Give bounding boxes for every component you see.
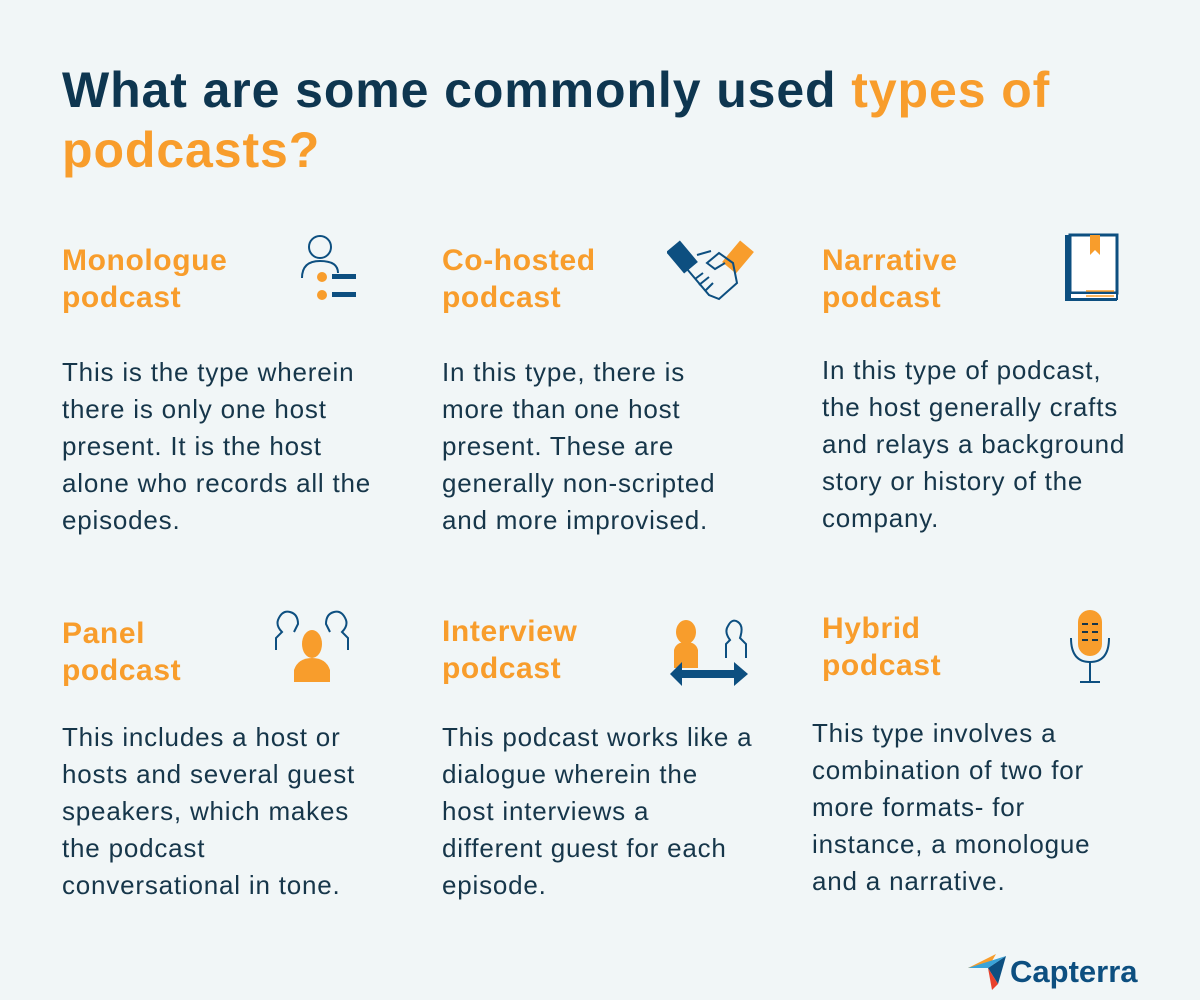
heading: interview: Interview xyxy=(442,615,577,648)
body: interview: dialogue wherein the xyxy=(442,759,698,789)
heading: co-hosted: podcast xyxy=(442,281,561,314)
panel: panel podcast xyxy=(62,610,355,900)
panel: narrative xyxy=(822,234,1125,533)
heading: hybrid xyxy=(822,612,941,682)
body: interview: different guest for each xyxy=(442,833,727,863)
title: What are some commonly used types of xyxy=(62,62,1050,118)
heading: interview: podcast xyxy=(442,652,561,685)
title: podcasts? xyxy=(62,122,320,178)
heading: co-hosted: Co-hosted xyxy=(442,244,596,277)
body: hybrid: more formats- for xyxy=(812,792,1025,822)
body: hybrid: instance, a monologue xyxy=(812,829,1090,859)
icon: person checklist xyxy=(301,235,356,300)
body: interview xyxy=(442,722,752,900)
body: co-hosted: generally non-scripted xyxy=(442,468,715,498)
body: co-hosted: In this type, there is xyxy=(442,357,685,387)
body: narrative: and relays a background xyxy=(822,429,1125,459)
body: hybrid: combination of two for xyxy=(812,755,1084,785)
icon: interview arrows xyxy=(670,620,748,686)
icon: microphone xyxy=(1070,610,1110,683)
panel: interview xyxy=(442,615,752,900)
body: interview: episode. xyxy=(442,870,547,900)
body: monologue: present. It is the host xyxy=(62,431,322,461)
heading: interview xyxy=(442,615,577,685)
body: co-hosted: present. These are xyxy=(442,431,674,461)
icon: group xyxy=(275,610,349,682)
heading: hybrid: Hybrid xyxy=(822,612,921,645)
body: panel: the podcast xyxy=(62,833,205,863)
body: hybrid: and a narrative. xyxy=(812,866,1005,896)
heading: co-hosted xyxy=(442,244,596,314)
body: interview: This podcast works like a xyxy=(442,722,752,752)
heading: narrative xyxy=(822,244,957,314)
body: narrative: the host generally crafts xyxy=(822,392,1118,422)
heading: monologue: Monologue xyxy=(62,244,227,277)
heading: hybrid: podcast xyxy=(822,649,941,682)
body: co-hosted xyxy=(442,357,715,535)
heading: monologue xyxy=(62,244,227,314)
body: narrative: story or history of the xyxy=(822,466,1083,496)
body: panel: This includes a host or xyxy=(62,722,341,752)
heading: narrative: Narrative xyxy=(822,244,957,277)
body: panel xyxy=(62,722,355,900)
body: narrative xyxy=(822,355,1125,533)
body: monologue: This is the type wherein xyxy=(62,357,354,387)
body: narrative: company. xyxy=(822,503,939,533)
title xyxy=(62,62,1050,178)
heading: panel: Panel xyxy=(62,617,145,650)
body: monologue: episodes. xyxy=(62,505,180,535)
body: hybrid: This type involves a xyxy=(812,718,1056,748)
heading: panel: podcast xyxy=(62,654,181,687)
body: hybrid xyxy=(812,718,1090,896)
body: monologue: there is only one host xyxy=(62,394,327,424)
icon: handshake xyxy=(667,240,754,300)
body: co-hosted: and more improvised. xyxy=(442,505,708,535)
body: co-hosted: more than one host xyxy=(442,394,680,424)
panel: co-hosted xyxy=(442,240,754,535)
body: narrative: In this type of podcast, xyxy=(822,355,1101,385)
heading: monologue: podcast xyxy=(62,281,181,314)
logo: Capterra: Capterra xyxy=(1010,954,1138,989)
heading: panel xyxy=(62,617,181,687)
icon: book xyxy=(1065,234,1118,301)
panel: monologue xyxy=(62,235,371,535)
heading: narrative: podcast xyxy=(822,281,941,314)
body: panel: hosts and several guest xyxy=(62,759,355,789)
body: interview: host interviews a xyxy=(442,796,649,826)
panel: hybrid xyxy=(812,610,1110,896)
body: monologue xyxy=(62,357,371,535)
body: panel: conversational in tone. xyxy=(62,870,341,900)
body: monologue: alone who records all the xyxy=(62,468,371,498)
body: panel: speakers, which makes xyxy=(62,796,349,826)
